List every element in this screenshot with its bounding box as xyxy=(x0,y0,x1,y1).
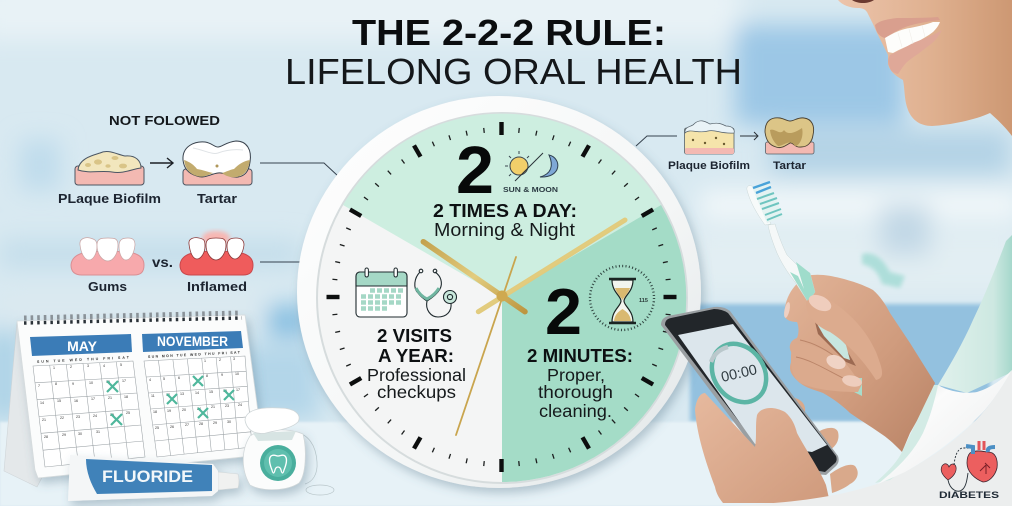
index fingertip nail xyxy=(783,302,791,318)
label: tartar: Tartar xyxy=(197,191,237,206)
May dates: 7 xyxy=(38,384,40,388)
text: two visits a year xyxy=(367,326,466,402)
hour hand xyxy=(423,242,525,312)
May dates: 8 xyxy=(55,382,57,386)
label: gums: Gums xyxy=(88,279,127,294)
big number: minutes: 2 xyxy=(545,275,582,348)
May dates: 25 xyxy=(110,413,114,417)
November dates: 20 xyxy=(182,408,186,412)
May dates: 23 xyxy=(76,415,80,419)
clock hands xyxy=(423,220,625,435)
May dates: 4 xyxy=(103,364,105,368)
May weekday labels: SUN TUE WED THU FRI SAT xyxy=(37,355,130,364)
nostril shadow xyxy=(852,0,874,3)
May dates: 21 xyxy=(42,418,46,422)
title: LIFELONG ORAL HEALTH xyxy=(285,51,742,92)
clock sector: 2 times a day xyxy=(343,114,661,297)
May dates: 16 xyxy=(74,399,78,403)
timer ring unfilled part xyxy=(711,347,728,362)
May dates: 22 xyxy=(60,416,64,420)
text: two minutes: thorough xyxy=(538,382,613,402)
May dates: 1 xyxy=(53,366,55,370)
lower fingers xyxy=(791,344,862,392)
desk calendar xyxy=(4,313,262,487)
title xyxy=(285,12,742,92)
November dates: 16 xyxy=(223,389,227,393)
connector: inflamed to clock xyxy=(260,261,300,263)
timer readout: 00:00 xyxy=(720,362,759,386)
November dates: 11 xyxy=(151,394,155,398)
November dates: 15 xyxy=(209,390,213,394)
heading: not followed: NOT FOLOWED xyxy=(109,113,220,128)
thumb xyxy=(806,297,882,380)
month header: May: MAY xyxy=(67,338,98,354)
November dates: 5 xyxy=(163,377,165,381)
November dates: 12 xyxy=(166,393,170,397)
appointment marks xyxy=(107,376,234,425)
page under fold xyxy=(730,370,1012,506)
November dates: 1 xyxy=(204,359,206,363)
thumb nail xyxy=(806,292,834,314)
November dates: 14 xyxy=(195,391,199,395)
November dates: 27 xyxy=(185,423,189,427)
November dates: 10 xyxy=(235,372,239,376)
timer ring xyxy=(701,333,777,413)
November dates: 2 xyxy=(219,358,221,362)
connector: clock to right icons xyxy=(636,136,677,146)
May dates: 21 xyxy=(108,396,112,400)
toothbrush head xyxy=(747,186,771,225)
toothbrush handle xyxy=(768,224,815,302)
November dates: 13 xyxy=(180,392,184,396)
May dates: 29 xyxy=(62,433,66,437)
clock frame xyxy=(297,96,701,488)
sleeve strip xyxy=(875,385,940,483)
November dates: 6 xyxy=(178,376,180,380)
icon: sun and moon xyxy=(505,151,558,181)
label: plaque biofilm: PLaque Biofilm xyxy=(58,191,161,206)
teeth separators xyxy=(898,25,925,47)
label: dial mark: 115 xyxy=(639,298,648,304)
November dates: 24 xyxy=(238,403,242,407)
clock inner rim xyxy=(316,112,688,484)
minute hand xyxy=(478,220,625,312)
November calendar grid xyxy=(144,356,252,457)
toothbrush lower handle xyxy=(816,320,850,360)
big number: times a day: 2 xyxy=(456,133,494,208)
November dates xyxy=(149,357,242,430)
text: two visits a year: Professional xyxy=(367,365,466,385)
May dates: 24 xyxy=(93,414,97,418)
icon: tartar tooth xyxy=(183,141,252,185)
wall clock xyxy=(297,96,701,488)
toothbrush xyxy=(747,181,862,396)
May dates xyxy=(38,363,130,439)
icon: plaque biofilm small xyxy=(684,121,734,154)
November dates: 28 xyxy=(199,422,203,426)
label: diabetes: DIABETES xyxy=(939,490,999,501)
icon: tartar small xyxy=(765,118,814,154)
icon: stethoscope xyxy=(415,269,456,317)
November dates: 21 xyxy=(211,405,215,409)
icon: inflamed gums xyxy=(180,231,253,275)
clothing: mint top xyxy=(938,235,1012,393)
ring fingernail xyxy=(841,374,863,388)
May dates: 16 xyxy=(106,380,110,384)
icon: healthy gums xyxy=(71,238,144,275)
May dates: 3 xyxy=(87,364,89,368)
May dates: 14 xyxy=(40,401,44,405)
toothbrush tip xyxy=(852,378,862,396)
folded page xyxy=(878,370,1012,484)
month header: May xyxy=(30,334,132,356)
page curl corner xyxy=(730,370,1012,506)
second hand xyxy=(456,257,516,435)
label: plaque biofilm right: Plaque Biofilm xyxy=(668,160,750,172)
November dates: 30 xyxy=(227,420,231,424)
text: two minutes: cleaning. xyxy=(539,401,612,421)
May dates: 10 xyxy=(89,381,93,385)
November dates: 24 xyxy=(197,407,201,411)
label: inflamed: Inflamed xyxy=(187,279,247,294)
November weekday labels: SUN MON TUE WED THU FRI SAT xyxy=(148,350,241,359)
month header: November xyxy=(142,331,243,352)
text: two minutes xyxy=(527,346,633,421)
phone screen xyxy=(678,324,827,452)
hand holding phone xyxy=(695,393,830,503)
text: two minutes: Proper, xyxy=(547,365,605,385)
label: tartar right: Tartar xyxy=(773,160,807,172)
November dates: 18 xyxy=(153,410,157,414)
May dates: 30 xyxy=(78,432,82,436)
heart aorta xyxy=(979,441,984,450)
May dates: 31 xyxy=(96,430,100,434)
title: THE 2-2-2 RULE: xyxy=(352,12,666,53)
heart vessels xyxy=(966,446,995,454)
November dates: 23 xyxy=(225,404,229,408)
centre pin xyxy=(496,290,508,302)
icon: hourglass with dial xyxy=(590,266,654,330)
November dates: 8 xyxy=(206,374,208,378)
icon: calendar xyxy=(356,268,407,317)
phone xyxy=(661,307,839,475)
November dates: 9 xyxy=(221,373,223,377)
icon: diabetes heart xyxy=(941,441,997,491)
clock sector: 2 minutes xyxy=(502,205,686,482)
May dates: 5 xyxy=(120,363,122,367)
May dates: 17 xyxy=(122,379,126,383)
text: two times a day: 2 TIMES A DAY: xyxy=(433,201,577,221)
fingers behind phone xyxy=(795,398,858,493)
hand holding toothbrush xyxy=(747,181,935,452)
heart branches xyxy=(980,463,990,474)
May dates: 25 xyxy=(126,411,130,415)
May dates: 18 xyxy=(124,395,128,399)
small heart xyxy=(941,464,956,480)
November dates: 3 xyxy=(233,357,235,361)
May dates: 15 xyxy=(57,399,61,403)
smiling face xyxy=(838,0,1012,136)
icon: tooth on floss xyxy=(269,455,287,473)
large heart xyxy=(967,451,997,482)
May dates: 28 xyxy=(44,435,48,439)
November dates: 25 xyxy=(155,426,159,430)
hand silhouette xyxy=(785,275,935,452)
text: two times a day xyxy=(433,201,577,240)
floss container xyxy=(243,408,334,495)
November dates: 17 xyxy=(236,388,240,392)
tube connection xyxy=(948,473,968,491)
May dates: 2 xyxy=(70,365,72,369)
palm crevice xyxy=(815,322,856,366)
text: two visits a year: 2 VISITS xyxy=(377,326,452,346)
arrow: small plaque to tartar xyxy=(740,132,758,140)
icon: plaque biofilm xyxy=(75,151,144,185)
label: sun and moon: SUN & MOON xyxy=(503,185,558,194)
lower lip xyxy=(888,30,942,74)
text: two times a day: Morning & Night xyxy=(434,220,575,240)
November dates: 4 xyxy=(149,378,151,382)
November dates: 26 xyxy=(170,425,174,429)
upper lip xyxy=(875,17,940,38)
text: two minutes: 2 MINUTES: xyxy=(527,346,633,366)
teeth xyxy=(885,22,940,53)
text: two visits a year: A YEAR: xyxy=(378,346,454,366)
toothbrush bristles xyxy=(752,181,783,223)
month header: November: NOVEMBER xyxy=(157,334,228,349)
dashed connection xyxy=(954,448,970,465)
toothbrush grip xyxy=(790,262,815,302)
November dates: 19 xyxy=(167,409,171,413)
finger creases xyxy=(796,340,847,380)
arrow: plaque to tartar xyxy=(150,158,173,168)
text: two visits a year: checkups xyxy=(377,382,456,402)
label: fluoride: FLUORIDE xyxy=(102,467,193,486)
minute ticks xyxy=(326,122,676,472)
middle fingernail xyxy=(824,352,848,372)
May calendar grid xyxy=(33,361,145,467)
toothpaste tube xyxy=(68,455,239,501)
label: vs: vs. xyxy=(152,255,173,270)
clock face: white quadrant xyxy=(318,114,686,482)
November dates: 29 xyxy=(213,421,217,425)
connector: tartar to clock xyxy=(260,163,338,176)
May dates: 17 xyxy=(91,397,95,401)
May dates: 9 xyxy=(72,382,74,386)
